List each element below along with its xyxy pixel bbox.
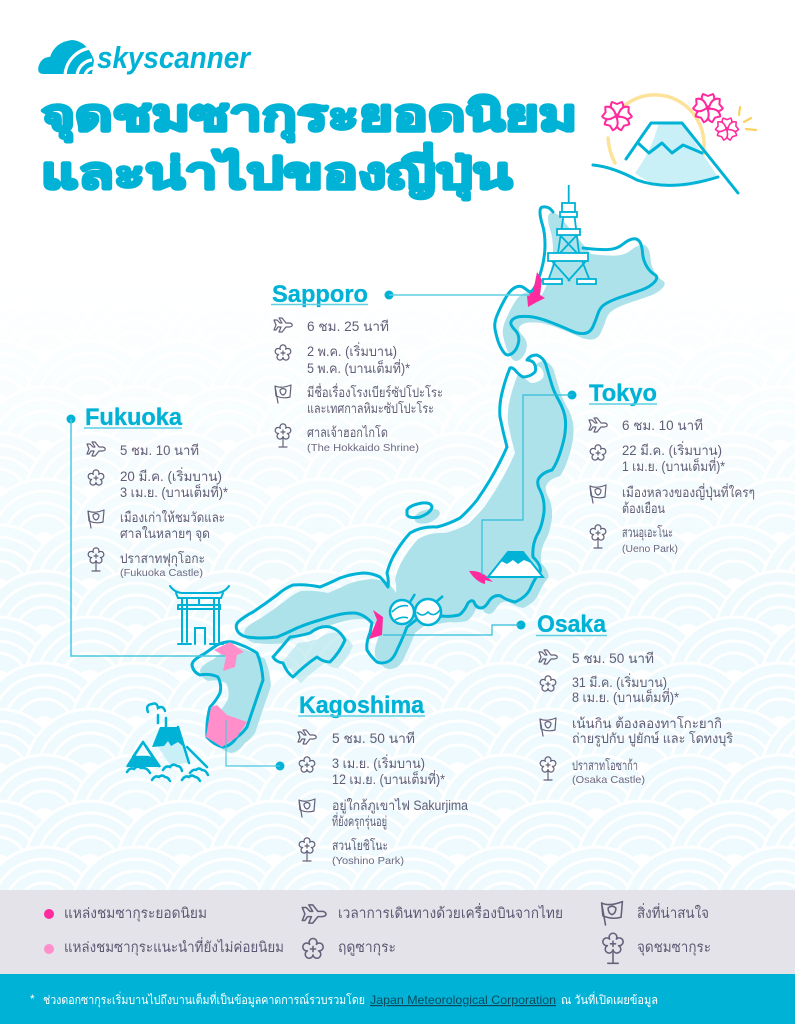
legend: flight time [302, 903, 563, 923]
panel: Tokyo: ต้องเยือน [622, 501, 665, 516]
panel: Tokyo: เมืองหลวงของญี่ปุ่นที่ใครๆ [622, 483, 755, 501]
panel: Kagoshima: 3 เม.ย. (เริ่มบาน) [332, 754, 425, 771]
logo: skyscanner: skyscanner [97, 40, 252, 75]
panel: Tokyo: สวนอุเอะโนะ [622, 524, 673, 541]
icon: cloud [38, 40, 94, 76]
legend: recommended: แหล่งชมซากุระแนะนำที่ยังไม่ค่อยนิยม [64, 937, 284, 956]
panel: Sapporo: (The Hokkaido Shrine) [307, 442, 419, 454]
heading: Osaka: Osaka [537, 611, 607, 638]
title [41, 92, 577, 201]
legend: attraction: สิ่งที่น่าสนใจ [637, 903, 709, 922]
icon: volcano [127, 704, 208, 781]
panel: Osaka: 8 เม.ย. (บานเต็มที่)* [572, 688, 680, 705]
panel: Tokyo: (Ueno Park) [622, 543, 678, 555]
legend: popular: แหล่งชมซากุระยอดนิยม [64, 906, 207, 922]
panel: Fukuoka: ศาลในหลายๆ จุด [120, 525, 210, 542]
icon: torii gate [170, 586, 229, 644]
panel: Fukuoka: 20 มี.ค. (เริ่มบาน) [120, 467, 222, 484]
legend: flight time: เวลาการเดินทางด้วยเครื่องบินจากไทย [338, 903, 563, 922]
panel: Sapporo: 2 พ.ค. (เริ่มบาน) [307, 342, 397, 359]
panel: Sapporo [271, 281, 530, 454]
panel: Kagoshima: 12 เม.ย. (บานเต็มที่)* [332, 770, 446, 787]
icon: map Fuji [488, 552, 543, 577]
heading: Kagoshima: Kagoshima [299, 692, 425, 719]
legend: attraction [602, 902, 709, 925]
panel: Sapporo: 5 พ.ค. (บานเต็มที่)* [307, 359, 411, 376]
panel: Kagoshima [226, 692, 468, 867]
panel: Sapporo: มีชื่อเรื่องโรงเบียร์ซัปโปะโระ [307, 383, 443, 400]
panel: Kagoshima: สวนโยชิโนะ [332, 837, 388, 853]
title: และน่าไปของญี่ปุ่น [41, 143, 513, 201]
panel: Sapporo: 6 ชม. 25 นาที [307, 319, 389, 334]
popular sakura areas [369, 272, 545, 639]
panel: Osaka [383, 611, 733, 786]
lesser-known sakura areas [206, 642, 247, 747]
panel: Sapporo: และเทศกาลหิมะซัปโปะโระ [307, 400, 434, 416]
panel: Osaka: 31 มี.ค. (เริ่มบาน) [572, 673, 667, 690]
panel: Fukuoka: เมืองเก่าให้ชมวัดและ [120, 509, 225, 525]
title: จุดชมซากุระยอดนิยม [41, 92, 577, 143]
panel: Osaka: ถ่ายรูปกับ ปูยักษ์ และ โดทงบุริ [572, 730, 733, 747]
footer: ช่วงดอกซากุระเริ่มบานไปถึงบานเต็มที่เป็นข้อมูลคาดการณ์รวบรวมโดย [43, 991, 365, 1008]
icon: Sapporo tower [543, 185, 596, 284]
panel: Osaka: ปราสาทโอซาก้า [572, 757, 638, 773]
panel: Fukuoka: 5 ชม. 10 นาที [120, 443, 199, 458]
panel: Tokyo [482, 380, 755, 575]
heading: Sapporo: Sapporo [272, 281, 368, 308]
legend: viewing spot: จุดชมซากุระ [637, 940, 711, 956]
panel: Tokyo: 1 เม.ย. (บานเต็มที่)* [622, 457, 726, 474]
panel: Osaka: 5 ชม. 50 นาที [572, 651, 654, 666]
panel: Osaka: (Osaka Castle) [572, 774, 645, 786]
legend: sakura season [303, 938, 396, 958]
panel: legend [0, 890, 795, 974]
panel: Kagoshima: (Yoshino Park) [332, 855, 404, 867]
panel: Kagoshima: ที่ยังครุกรุ่นอยู่ [332, 812, 387, 830]
panel: Sapporo: ศาลเจ้าฮอกไกโด [307, 424, 388, 440]
panel: Fukuoka [66, 404, 229, 656]
panel: Tokyo: 6 ชม. 10 นาที [622, 418, 703, 433]
footer: ณ วันที่เปิดเผยข้อมูล [561, 991, 658, 1008]
map of Japan [127, 185, 665, 781]
footer [0, 974, 795, 1024]
footer: Japan Meteorological Corporation [370, 993, 556, 1007]
panel: Fukuoka: ปราสาทฟุกุโอกะ [120, 550, 205, 567]
logo: skyscanner [38, 40, 252, 76]
panel: Osaka: เน้นกิน ต้องลองทาโกะยากิ [572, 715, 722, 731]
icon: Osaka circles [390, 594, 443, 625]
panel: Kagoshima: 5 ชม. 50 นาที [332, 731, 415, 746]
heading: Fukuoka: Fukuoka [85, 404, 183, 431]
legend: sakura season: ฤดูซากุระ [338, 940, 396, 956]
land shading [200, 213, 665, 753]
panel: Fukuoka: (Fukuoka Castle) [120, 567, 203, 579]
panel: Kagoshima: อยู่ใกล้ภูเขาไฟ Sakurjima [332, 797, 468, 814]
legend: viewing spot [603, 933, 711, 963]
panel: Tokyo: 22 มี.ค. (เริ่มบาน) [622, 441, 722, 458]
coastlines [192, 207, 657, 747]
panel: Fukuoka: 3 เม.ย. (บานเต็มที่)* [120, 483, 229, 500]
illustration: Mount Fuji with sakura [593, 94, 756, 193]
heading: Tokyo: Tokyo [589, 380, 657, 407]
footer: * [30, 992, 35, 1006]
